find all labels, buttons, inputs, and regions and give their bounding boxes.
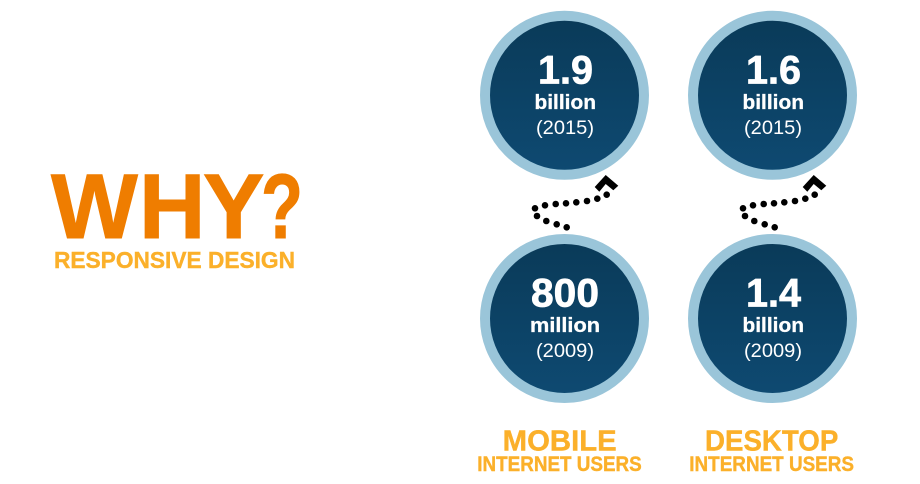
column label: desktop internet users — [689, 426, 854, 476]
stat circle: desktop 2009 — [693, 239, 852, 398]
subtitle: responsive design: RESPONSIVE DESIGN — [54, 247, 295, 273]
stat circle: mobile 2015: (2015) — [536, 118, 594, 139]
stat circle: mobile 2009: 800 — [531, 272, 599, 316]
column label: mobile internet users — [477, 426, 642, 476]
stat circle: desktop 2015: (2015) — [744, 118, 802, 139]
stat circle: mobile 2009: (2009) — [536, 341, 594, 362]
title: WHY?: WHY — [51, 156, 264, 258]
arrow: mobile growth — [532, 175, 618, 231]
stat circle: desktop 2009: (2009) — [744, 341, 802, 362]
stat circle: desktop 2015 — [693, 16, 852, 175]
stat circle: desktop 2009: billion — [742, 315, 804, 337]
stat circle: mobile 2015: 1.9 — [538, 48, 593, 92]
column label: desktop internet users: DESKTOP — [705, 426, 838, 458]
stat circle: mobile 2015 — [485, 16, 644, 175]
stat circle: desktop 2015: billion — [742, 92, 804, 114]
column label: mobile internet users: MOBILE — [503, 426, 617, 458]
stat circle: mobile 2009 — [485, 239, 644, 398]
column label: mobile internet users: INTERNET USERS — [477, 453, 642, 476]
stat circle: desktop 2015: 1.6 — [746, 48, 801, 92]
column label: desktop internet users: INTERNET USERS — [689, 453, 854, 476]
arrow: desktop growth — [740, 175, 826, 231]
stat circle: desktop 2009: 1.4 — [746, 272, 802, 316]
stat circle: mobile 2015: billion — [534, 92, 596, 114]
title: WHY?: ? — [261, 156, 303, 258]
stat circle: mobile 2009: million — [530, 315, 600, 337]
